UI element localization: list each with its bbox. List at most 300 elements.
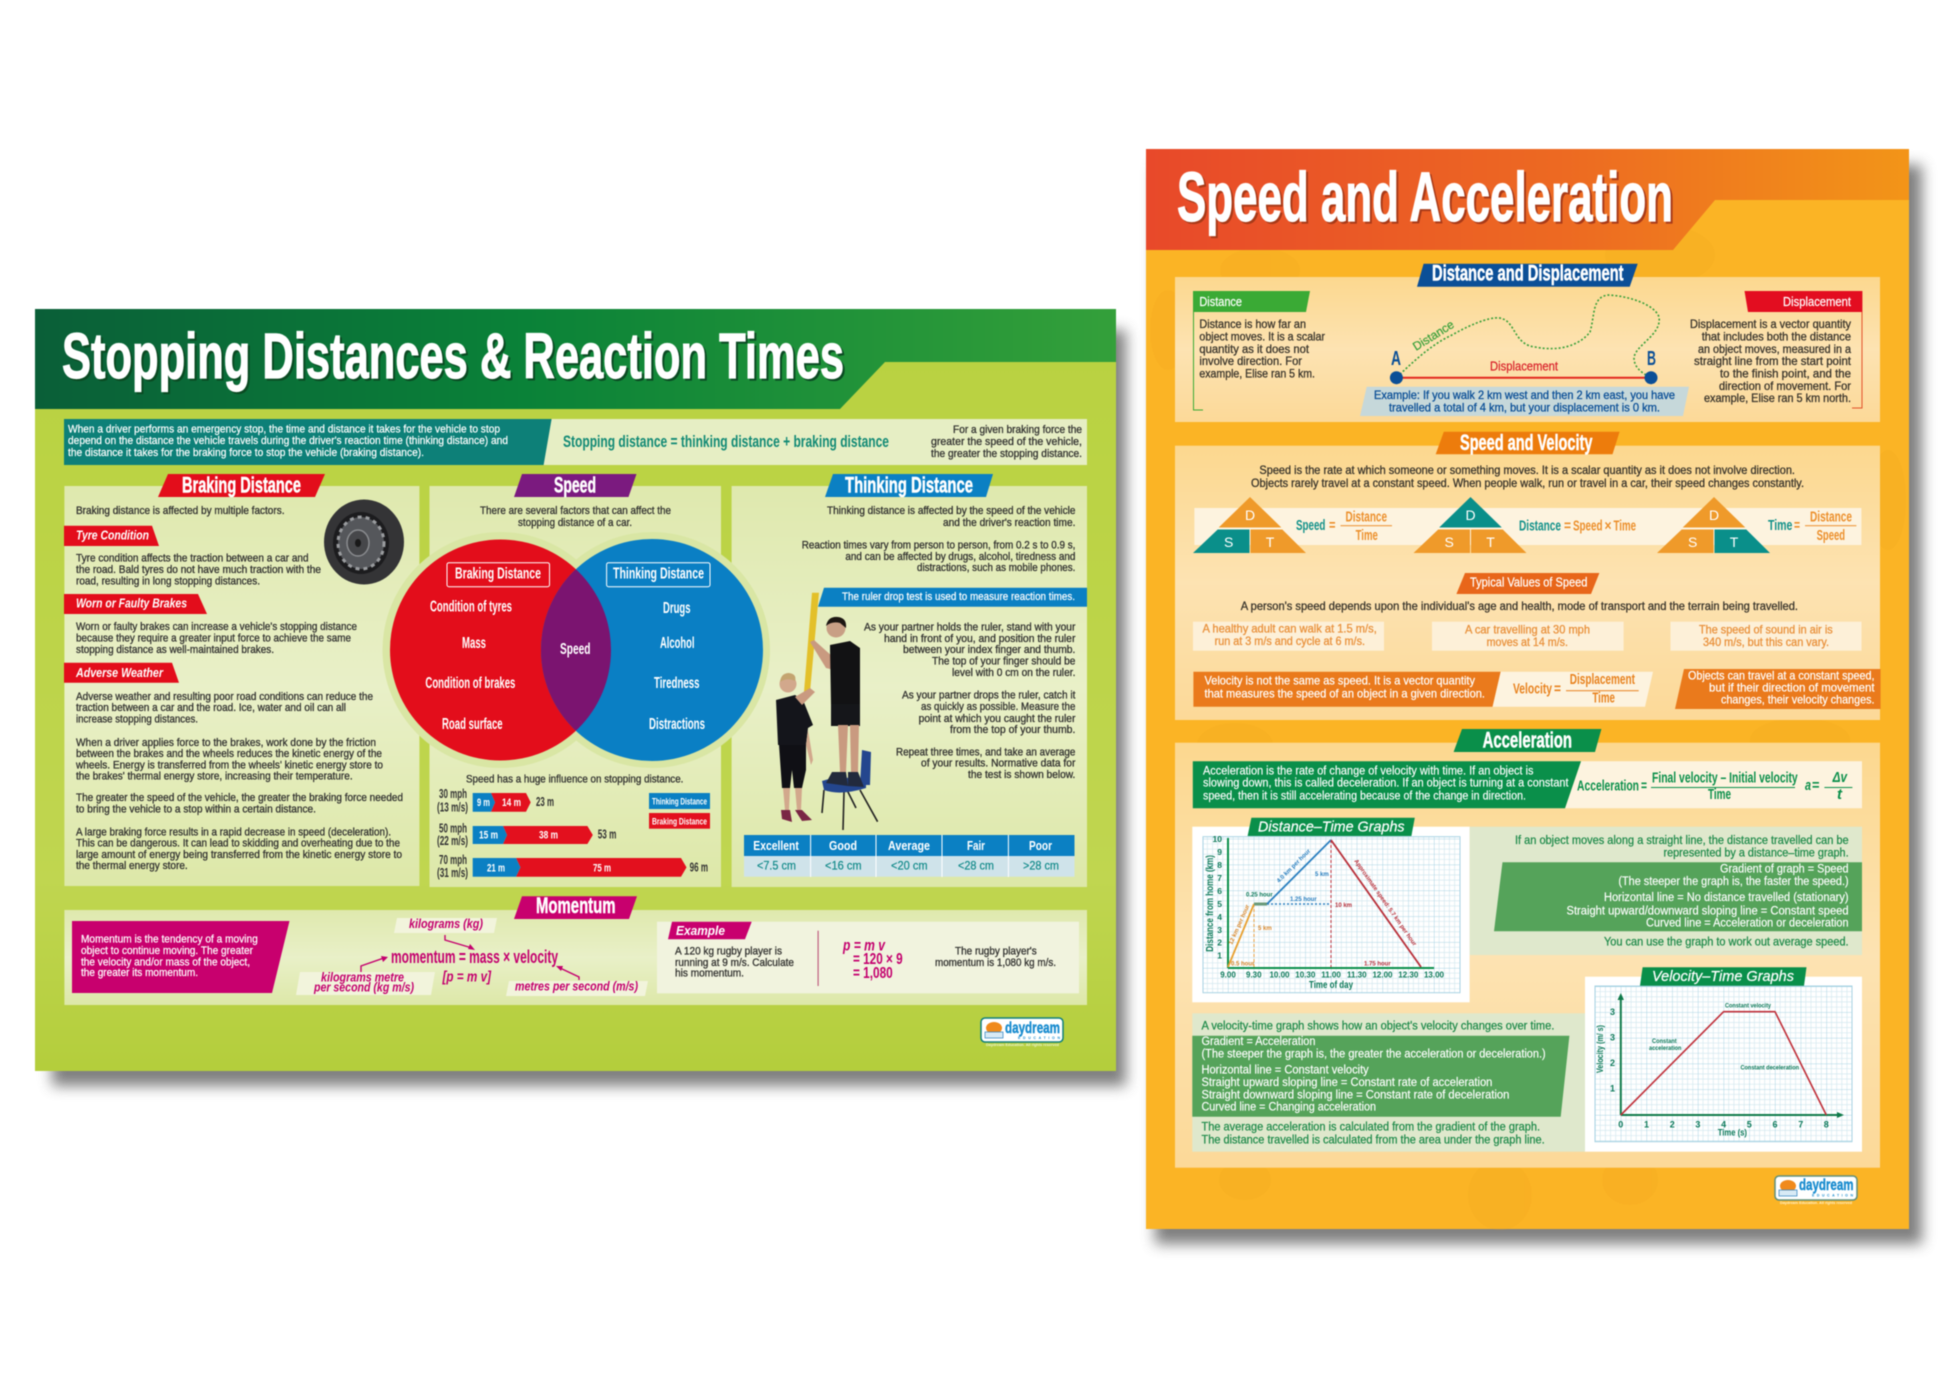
- chart: velocity-time graph: Constant deceleration: [1740, 1064, 1799, 1071]
- text: adverse weather and braking force: When a driver applies force to the brakes, work done by the friction: [76, 737, 376, 749]
- chart: distance-time graph: 13.00: [1424, 970, 1445, 979]
- label box: thinking distance: [607, 563, 710, 587]
- chart: distance-time graph: 5 km: [1315, 872, 1329, 878]
- text panel: distance-time graphs: (The steeper the graph is, the faster the speed.): [1618, 874, 1849, 888]
- bar: 30 mph: [437, 786, 554, 815]
- chart: distance-time graph: 3: [1217, 925, 1222, 935]
- chart: distance-time graph: 7: [1217, 873, 1222, 883]
- decorative background circles: [1150, 225, 1906, 1230]
- formula: acceleration: Δv: [1832, 769, 1848, 786]
- formula: acceleration: =: [1641, 778, 1647, 795]
- chart: distance-time graph: [1192, 818, 1470, 1002]
- text panel: distance-time graphs: represented by a distance–time graph.: [1664, 846, 1849, 860]
- formula: velocity: Time: [1592, 690, 1615, 707]
- text: tyre condition: [76, 553, 321, 587]
- formula triangle: speed: T: [1266, 534, 1275, 550]
- sub-heading: adverse weather: [64, 663, 179, 683]
- callout: momentum definition: the velocity and/or mass of the object,: [81, 956, 250, 968]
- heading: distance and displacement: [1417, 261, 1638, 287]
- venn diagram: Distractions: [649, 716, 705, 733]
- panel: momentum: [64, 893, 1087, 1005]
- bar: 70 mph: 21 m: [487, 863, 505, 875]
- intro panel: the distance it takes for the braking force to stop the vehicle (braking distance).: [68, 447, 424, 459]
- formula: acceleration: t: [1837, 786, 1843, 803]
- text: worn or faulty brakes: [76, 621, 357, 656]
- heading: distance and displacement: Distance and Displacement: [1432, 261, 1624, 286]
- definition: displacement: an object moves, measured in a: [1698, 342, 1851, 356]
- venn diagram: Road surface: [442, 716, 503, 733]
- callout: acceleration definition: slowing down, this is called deceleration. If an object is turning at a constant: [1203, 776, 1569, 790]
- definition: displacement: [1690, 291, 1862, 408]
- text panel: distance-time graphs: Gradient of graph = Speed: [1720, 861, 1849, 875]
- text: ruler drop test instructions: point at which you caught the ruler: [919, 713, 1076, 725]
- formula triangle: time: D: [1709, 507, 1719, 523]
- definition: displacement: direction of movement. For: [1719, 379, 1851, 393]
- callout: momentum definition: [72, 921, 290, 993]
- heading: acceleration: Acceleration: [1483, 727, 1572, 752]
- chart: velocity-time graph: 1: [1610, 1084, 1615, 1094]
- table: normative reaction data: Excellent: [753, 839, 799, 853]
- formula: distance: Distance: [1519, 518, 1561, 535]
- tag: distance-time graphs: Distance–Time Graphs: [1258, 820, 1405, 836]
- callout: ruler drop test: [818, 588, 1087, 607]
- text panel: velocity-time graphs: The distance travelled is calculated from the area under the graph line.: [1202, 1132, 1545, 1146]
- formula: acceleration: Time: [1708, 786, 1731, 803]
- bar: 50 mph: (22 m/s): [437, 833, 468, 848]
- formula: velocity: [1493, 671, 1653, 707]
- logo: daydream education: EDUCATION: [1018, 1036, 1060, 1040]
- bar: 30 mph: 23 m: [536, 794, 554, 809]
- text panel: velocity-time graphs: Gradient = Acceleration: [1202, 1034, 1315, 1048]
- venn diagram: Condition of brakes: [425, 675, 515, 692]
- callout: velocity changes: Objects can travel at a constant speed,: [1688, 668, 1874, 682]
- text: adverse weather and braking force: the thermal energy store.: [76, 860, 188, 872]
- callout: displacement example: Example: If you walk 2 km west and then 2 km east, you have: [1374, 388, 1675, 402]
- text panel: velocity-time graphs: Horizontal line = Constant velocity: [1202, 1062, 1370, 1076]
- chart: velocity-time graph: acceleration: [1649, 1045, 1681, 1052]
- callout: momentum definition: the greater its momentum.: [81, 967, 198, 979]
- formula: acceleration: Final velocity – Initial velocity: [1652, 769, 1798, 786]
- definition: distance: object moves. It is a scalar: [1199, 330, 1325, 344]
- callout: momentum definition: Momentum is the tendency of a moving: [81, 934, 258, 946]
- table: normative reaction data: <16 cm: [825, 858, 862, 872]
- heading: momentum: Momentum: [536, 893, 616, 918]
- heading: speed and velocity: Speed and Velocity: [1460, 430, 1593, 455]
- venn diagram: Speed: [560, 641, 590, 658]
- formula: momentum with unit labels: kilograms metre: [321, 971, 404, 985]
- panel: worked example: running at 9 m/s. Calculate: [675, 957, 794, 969]
- callout: velocity changes: [1675, 668, 1881, 709]
- chart: distance-time graph: 4: [1217, 912, 1222, 922]
- intro panel: the greater the stopping distance.: [931, 448, 1082, 460]
- box: walking speed: [1193, 622, 1384, 651]
- text: thinking distance intro: and the driver's reaction time.: [943, 517, 1075, 529]
- panel: worked example: A 120 kg rugby player is: [675, 946, 783, 958]
- header band: [35, 309, 1116, 409]
- label box: braking distance: Braking Distance: [455, 566, 541, 583]
- bar: 70 mph: 70 mph: [439, 852, 467, 867]
- sub-heading: adverse weather: Adverse Weather: [75, 665, 164, 680]
- text: ruler drop test instructions: from the top of your thumb.: [950, 724, 1075, 736]
- formula: momentum with unit labels: metres per second (m/s): [515, 980, 638, 994]
- chart: distance-time graph: 12 km per hour: [1228, 903, 1252, 946]
- text: adverse weather and braking force: traction between a car and the road. Ice, water and oil can all: [76, 702, 346, 714]
- title: Speed and Acceleration: [1177, 158, 1673, 236]
- bar: 70 mph: 96 m: [690, 860, 708, 875]
- bar: 30 mph: 30 mph: [439, 786, 467, 801]
- bar: 70 mph: (31 m/s): [437, 865, 468, 880]
- text: adverse weather and braking force: wheels. Energy is transferred from the wheels' kinetic energy store to: [75, 759, 383, 771]
- definition: displacement: that includes both the distance: [1702, 330, 1851, 344]
- chart: distance-time graph: 10 km: [1335, 903, 1352, 909]
- box: speed of sound: The speed of sound in air is: [1699, 622, 1833, 636]
- callout: acceleration definition: speed, then it is still accelerating because of the change in direction.: [1203, 788, 1526, 802]
- text: thinking distance intro: [802, 505, 1075, 574]
- strip: acceleration formula background: [1565, 761, 1862, 808]
- sub-heading: typical values of speed: [1456, 573, 1599, 594]
- sub-heading: tyre condition: Tyre Condition: [76, 528, 149, 542]
- panel: braking distance: Braking distance is affected by multiple factors.: [76, 505, 284, 517]
- formula: speed: Time: [1356, 527, 1378, 544]
- panel: speed and velocity: [1175, 430, 1881, 720]
- box: car speed: moves at 14 m/s.: [1487, 635, 1568, 649]
- sub-heading: worn or faulty brakes: [64, 594, 207, 614]
- chart: velocity-time graph: 2: [1670, 1120, 1675, 1130]
- formula triangle: speed: D: [1245, 507, 1255, 523]
- formula: time: [1768, 509, 1856, 544]
- chart: velocity-time graph: 3: [1610, 1007, 1615, 1017]
- logo: daydream education: daydream: [1799, 1177, 1854, 1194]
- callout: velocity changes: changes, their velocity changes.: [1721, 692, 1874, 706]
- icon: tyre: [324, 500, 404, 584]
- intro panel: Stopping distance = thinking distance + braking distance: [563, 432, 889, 451]
- text: adverse weather and braking force: increase stopping distances.: [76, 714, 198, 726]
- intro panel: greater the speed of the vehicle,: [931, 436, 1082, 448]
- venn diagram: Mass: [462, 635, 486, 652]
- text panel: velocity-time graphs: The average acceleration is calculated from the gradient of the graph.: [1202, 1120, 1540, 1134]
- table: normative reaction data: Good: [829, 839, 857, 853]
- venn diagram: Drugs: [663, 600, 690, 617]
- legend: [649, 793, 710, 829]
- text: adverse weather and braking force: The greater the speed of the vehicle, the greater the braking force needed: [76, 792, 403, 804]
- formula: acceleration: [1577, 769, 1852, 803]
- heading: braking distance: Braking Distance: [182, 473, 301, 498]
- text panel: distance-time graphs: You can use the graph to work out average speed.: [1604, 935, 1849, 949]
- logo: daydream education: daydream: [1005, 1020, 1060, 1037]
- chart: distance-time graph: Time of day: [1309, 980, 1353, 991]
- chart: distance-time graph: 9.30: [1246, 970, 1262, 979]
- poster: Speed and Acceleration: [1146, 149, 1909, 1230]
- formula: momentum with unit labels: [p = m v]: [442, 969, 492, 986]
- bar: 50 mph: 15 m: [479, 830, 498, 842]
- label box: thinking distance: Thinking Distance: [613, 566, 704, 583]
- logo: daydream education: [1775, 1176, 1857, 1205]
- chart: velocity-time graph: 1: [1644, 1120, 1649, 1130]
- header band: [1146, 149, 1909, 250]
- chart: velocity-time graph: Constant: [1652, 1038, 1677, 1045]
- definition: displacement: Displacement is a vector quantity: [1690, 317, 1851, 331]
- venn diagram: Tiredness: [654, 675, 700, 692]
- table: normative reaction data: [744, 835, 1074, 877]
- chart: distance-time graph: 4.0 km per hour: [1276, 848, 1312, 884]
- venn diagram: Alcohol: [660, 635, 694, 652]
- text panel: velocity-time graphs: [1192, 1013, 1585, 1152]
- sub-heading: tyre condition: [64, 526, 159, 546]
- text panel: distance-time graphs: Curved line = Acceleration or deceleration: [1646, 916, 1849, 930]
- definition: displacement: example, Elise ran 5 km north.: [1704, 391, 1851, 405]
- definition: distance: involve direction. For: [1199, 354, 1302, 368]
- text panel: distance-time graphs: Straight upward/downward sloping line = Constant speed: [1566, 903, 1849, 917]
- text panel: velocity-time graphs: A velocity-time graph shows how an object's velocity changes over time.: [1202, 1018, 1554, 1032]
- text: adverse weather and braking force: the brakes' thermal energy store, increasing their temperature.: [76, 771, 353, 783]
- text: ruler drop test instructions: [864, 622, 1076, 781]
- chart: velocity-time graph: 4: [1721, 1120, 1726, 1130]
- table: normative reaction data: Fair: [967, 839, 985, 853]
- formula triangle: distance: S: [1445, 534, 1454, 550]
- bar chart: stopping distance by speed: [437, 774, 710, 880]
- chart: distance-time graph: Distance from home (km): [1205, 855, 1216, 952]
- chart: distance-time graph: 0.5 hour: [1231, 962, 1255, 968]
- bar: 30 mph: (13 m/s): [437, 800, 468, 815]
- panel: speed: There are several factors that can affect the: [480, 505, 671, 517]
- formula: distance: Speed: [1573, 518, 1602, 535]
- chart: distance-time graph: 11.00: [1321, 970, 1341, 979]
- panel: speed: stopping distance of a car.: [518, 517, 632, 529]
- legend: Thinking Distance: [652, 796, 707, 808]
- callout: acceleration definition: [1193, 761, 1581, 808]
- chart: velocity-time graph: Constant velocity: [1725, 1003, 1771, 1010]
- box: car speed: A car travelling at 30 mph: [1465, 622, 1590, 636]
- definition: distance: example, Elise ran 5 km.: [1199, 367, 1315, 381]
- tag: example: Example: [676, 923, 725, 938]
- chart: distance-time graph: 8: [1217, 860, 1222, 870]
- title: Stopping Distances & Reaction Times: [62, 320, 844, 392]
- intro panel: When a driver performs an emergency stop, the time and distance it takes for the vehicle to stop: [68, 424, 500, 436]
- chart: velocity-time graph: 3: [1610, 1032, 1615, 1042]
- text panel: velocity-time graphs: Curved line = Changing acceleration: [1202, 1100, 1376, 1114]
- logo: daydream education: Daydream Education. All rights reserved: [986, 1043, 1059, 1047]
- logo: daydream education: Daydream Education. All rights reserved: [1780, 1201, 1852, 1205]
- bar: 30 mph: 14 m: [502, 797, 521, 809]
- panel: worked example: momentum is 1,080 kg m/s.: [935, 957, 1056, 969]
- text: adverse weather and braking force: This can be dangerous. It can lead to skidding and overheating due to the: [76, 838, 400, 850]
- definition: distance: quantity as it does not: [1199, 342, 1310, 356]
- formula triangle: speed: [1193, 497, 1306, 553]
- poster shadows: [52, 165, 1922, 1244]
- chart: distance-time graph: 1.75 hour: [1364, 962, 1391, 968]
- text: worn or faulty brakes: because they require a greater input force to achieve the same: [76, 633, 351, 645]
- text panel: velocity-time graphs: Straight downward sloping line = Constant rate of deceleration: [1202, 1087, 1509, 1101]
- chart: velocity-time graph: 5: [1747, 1120, 1752, 1130]
- panel: distance and displacement: [1175, 261, 1880, 422]
- bar chart: stopping distance by speed: Speed has a huge influence on stopping distance.: [466, 774, 683, 786]
- chart: velocity-time graph: Velocity (m/ s): [1595, 1025, 1605, 1073]
- panel: worked example: = 120 × 9: [853, 951, 903, 968]
- definition: distance: Distance: [1199, 295, 1242, 309]
- text panel: distance-time graphs: Horizontal line = No distance travelled (stationary): [1604, 890, 1849, 904]
- formula triangle: distance: D: [1465, 507, 1476, 523]
- table: normative reaction data: Average: [888, 839, 930, 853]
- text: ruler drop test instructions: of your results. Normative data for: [921, 758, 1076, 770]
- chart: distance-time graph: 10.00: [1269, 970, 1290, 979]
- text: thinking distance intro: Thinking distance is affected by the speed of the vehicle: [827, 505, 1075, 517]
- bar: 50 mph: [437, 821, 616, 848]
- text: worn or faulty brakes: Worn or faulty brakes can increase a vehicle's stopping distance: [76, 621, 357, 633]
- heading: speed: Speed: [554, 473, 596, 498]
- formula: time: =: [1794, 517, 1800, 534]
- panel: worked example: [657, 922, 1079, 993]
- intro panel: For a given braking force the: [953, 424, 1082, 436]
- table: normative reaction data: <7.5 cm: [757, 858, 796, 872]
- formula triangle: distance: [1414, 497, 1526, 553]
- formula: speed: Speed: [1296, 517, 1325, 534]
- poster: Stopping Distances and Reaction Times: [35, 309, 1116, 1071]
- chart: distance-time graph: 5 km: [1258, 926, 1272, 932]
- text: ruler drop test instructions: as quickly as possible. Measure the: [921, 701, 1075, 713]
- definition: displacement: straight line from the start point: [1694, 354, 1852, 368]
- callout: velocity definition: that measures the speed of an object in a given direction.: [1204, 687, 1485, 701]
- bar: 30 mph: 9 m: [477, 797, 490, 809]
- venn diagram: [382, 532, 770, 768]
- text: thinking distance intro: distractions, such as mobile phones.: [917, 562, 1075, 574]
- panel: worked example: p = m v: [842, 938, 886, 955]
- text panel: distance-time graphs: If an object moves along a straight line, the distance travelled can be: [1515, 833, 1849, 847]
- chart: velocity-time graph: Time (s): [1718, 1128, 1747, 1139]
- chart: velocity-time graph: 7: [1798, 1120, 1803, 1130]
- text: ruler drop test instructions: Repeat three times, and take an average: [896, 747, 1075, 759]
- legend: Braking Distance: [652, 816, 707, 828]
- table: normative reaction data: Poor: [1029, 839, 1052, 853]
- callout: ruler drop test: The ruler drop test is used to measure reaction times.: [842, 591, 1075, 603]
- callout: acceleration definition: Acceleration is the rate of change of velocity with time. If an object is: [1203, 763, 1534, 777]
- logo: daydream education: EDUCATION: [1812, 1194, 1853, 1198]
- chart: velocity-time graph: 2: [1610, 1058, 1615, 1068]
- definition: distance: [1193, 291, 1325, 410]
- chart: velocity-time graph: 8: [1824, 1120, 1829, 1130]
- tag: example: [668, 922, 752, 939]
- formula triangle: speed: S: [1224, 534, 1233, 550]
- text: tyre condition: the road. Bald tyres do not have much traction with the: [76, 564, 321, 576]
- formula: distance: ×: [1604, 518, 1612, 535]
- sub-heading: worn or faulty brakes: Worn or Faulty Brakes: [76, 596, 187, 611]
- text: ruler drop test instructions: As your partner drops the ruler, catch it: [902, 690, 1075, 702]
- tag: velocity-time graphs: Velocity–Time Graphs: [1652, 969, 1794, 985]
- chart: distance-time graph: Approximate speed: 5.7 km per hour: [1352, 859, 1417, 948]
- table: normative reaction data: <20 cm: [891, 858, 928, 872]
- chart: distance-time graph: 12.00: [1372, 970, 1393, 979]
- callout: velocity definition: [1193, 672, 1501, 707]
- formula: velocity: =: [1554, 680, 1561, 697]
- formula: distance: [1519, 518, 1636, 535]
- formula: time: Speed: [1817, 527, 1845, 544]
- chart: distance-time graph: 2: [1217, 938, 1222, 948]
- text: ruler drop test instructions: hand in front of you, and position the ruler: [884, 633, 1076, 645]
- bar: 70 mph: [437, 852, 708, 880]
- chart: distance-time graph: 1: [1217, 950, 1222, 960]
- text: ruler drop test instructions: level with 0 cm on the ruler.: [952, 667, 1075, 679]
- chart: distance-time graph: 9.00: [1220, 970, 1236, 979]
- formula: momentum with unit labels: per second (kg m/s): [313, 981, 414, 995]
- text: ruler drop test instructions: As your partner holds the ruler, stand with your: [864, 622, 1076, 634]
- panel: speed and velocity: A person's speed depends upon the individual's age and health, mode of transport and the terrain being travelled.: [1241, 599, 1798, 613]
- text panel: velocity-time graphs: (The steeper the graph is, the greater the acceleration or deceleration.): [1202, 1047, 1546, 1061]
- chart: distance-time graph: 1.25 hour: [1290, 897, 1317, 903]
- panel: worked example: his momentum.: [675, 968, 744, 980]
- text: tyre condition: road, resulting in long stopping distances.: [76, 575, 260, 587]
- sub-heading: typical values of speed: Typical Values of Speed: [1470, 575, 1587, 590]
- text: adverse weather and braking force: Adverse weather and resulting poor road conditions can reduce the: [76, 691, 373, 703]
- box: walking speed: A healthy adult can walk at 1.5 m/s,: [1202, 622, 1377, 636]
- intro panel: depend on the distance the vehicle travels during the driver's reaction time (thinking distance) and: [68, 435, 508, 447]
- formula: velocity: Displacement: [1570, 671, 1635, 688]
- heading: speed: [514, 473, 636, 498]
- diagram: distance vs displacement path: B: [1647, 348, 1656, 370]
- formula triangle: distance: T: [1486, 534, 1495, 550]
- panel: worked example: = 1,080: [853, 965, 893, 982]
- callout: displacement example: [1360, 387, 1689, 416]
- chart: distance-time graph: 0.25 hour: [1246, 892, 1273, 898]
- box: car speed: [1432, 622, 1624, 651]
- callout: velocity changes: but if their direction of movement: [1709, 681, 1875, 695]
- formula: momentum with unit labels: momentum = mass × velocity: [391, 947, 558, 967]
- text: ruler drop test instructions: between your index finger and thumb.: [903, 644, 1075, 656]
- text: tyre condition: Tyre condition affects the traction between a car and: [76, 553, 309, 565]
- callout: velocity definition: Velocity is not the same as speed. It is a vector quantity: [1204, 673, 1475, 687]
- text: ruler drop test instructions: The top of your finger should be: [932, 656, 1075, 668]
- table: normative reaction data: >28 cm: [1023, 858, 1059, 872]
- chart: velocity-time graph: [1585, 967, 1862, 1152]
- chart: distance-time graph: 5: [1217, 899, 1222, 909]
- chart: velocity-time graph: 6: [1772, 1120, 1778, 1130]
- definition: distance: Distance is how far an: [1199, 317, 1306, 331]
- callout: momentum definition: object to continue moving. The greater: [81, 945, 253, 957]
- formula: time: Time: [1768, 517, 1792, 534]
- box: speed of sound: 340 m/s, but this can vary.: [1703, 635, 1829, 649]
- text: adverse weather and braking force: [75, 691, 403, 872]
- text panel: distance-time graphs: [1470, 827, 1862, 955]
- panel: speed and velocity: Speed is the rate at which someone or something moves. It is a scalar quantity as it does not involve direction.: [1259, 463, 1795, 477]
- text: worn or faulty brakes: stopping distance as well-maintained brakes.: [76, 644, 274, 656]
- formula triangle: time: [1657, 497, 1770, 553]
- chart: velocity-time graph: 3: [1695, 1120, 1700, 1130]
- heading: thinking distance: Thinking Distance: [845, 473, 973, 498]
- bar: 50 mph: 38 m: [539, 830, 558, 842]
- formula: acceleration: =: [1812, 777, 1820, 794]
- text panel: velocity-time graphs: Straight upward sloping line = Constant rate of acceleration: [1202, 1075, 1492, 1089]
- panel: braking distance: [64, 473, 419, 886]
- panel: worked example: The rugby player's: [955, 945, 1037, 957]
- formula: acceleration: a: [1805, 777, 1811, 794]
- chart: distance-time graph: 9: [1217, 847, 1222, 857]
- text: adverse weather and braking force: large amount of energy being transferred from the kinetic energy store to: [76, 849, 402, 861]
- text: thinking distance intro: and can be affected by drugs, alcohol, tiredness and: [845, 551, 1075, 563]
- diagram: distance vs displacement path: Displacement: [1490, 360, 1558, 374]
- diagram: distance vs displacement path: Distance: [1410, 317, 1457, 354]
- formula: speed: [1296, 509, 1392, 544]
- panel: acceleration: [1175, 727, 1880, 1168]
- intro panel: [64, 419, 1087, 465]
- table: normative reaction data: <28 cm: [958, 858, 994, 872]
- formula triangle: time: S: [1688, 534, 1697, 550]
- formula: momentum with unit labels: kilograms (kg): [409, 917, 483, 931]
- bar: 50 mph: 50 mph: [439, 821, 467, 836]
- formula: speed: =: [1329, 517, 1336, 534]
- formula: velocity: Velocity: [1513, 680, 1552, 697]
- formula: distance: Time: [1614, 518, 1636, 535]
- panel: speed and velocity: Objects rarely travel at a constant speed. When people walk, run or travel in a car, their speed changes constantly.: [1251, 476, 1804, 490]
- definition: displacement: to the finish point, and the: [1720, 367, 1851, 381]
- text: ruler drop test instructions: the test is shown below.: [968, 769, 1075, 781]
